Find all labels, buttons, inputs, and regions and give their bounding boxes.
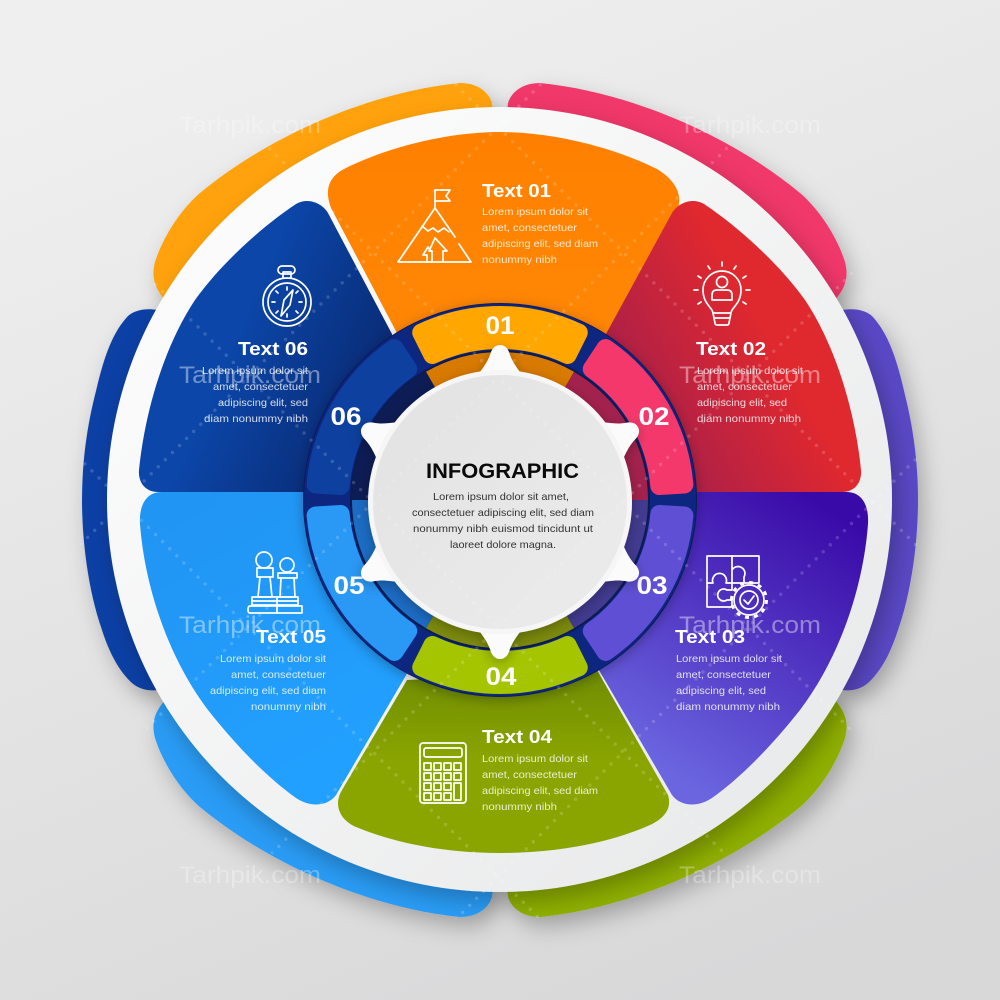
petal: blue [140, 492, 418, 804]
hub body text: Lorem ipsum dolor sit amet, [433, 491, 569, 503]
central ring [300, 304, 700, 696]
icon: calculator [420, 743, 466, 803]
ring numbers: 03 [636, 572, 668, 600]
knobs [350, 345, 650, 659]
icon: puzzle with gear [707, 556, 766, 618]
text block 04: adipiscing elit, sed diam [482, 785, 598, 797]
watermark text: Tarhpik.com [179, 362, 321, 389]
inner dark ring [350, 350, 650, 650]
text block 02: diam nonummy nibh [697, 413, 801, 425]
petal: green [338, 670, 669, 853]
six petals [139, 132, 868, 853]
text block 02: adipiscing elit, sed [697, 397, 787, 409]
outer coloured arcs [82, 83, 918, 917]
arc: purple [800, 309, 918, 690]
text block 03: adipiscing elit, sed [676, 685, 766, 697]
text block 01: Text 01 [482, 181, 551, 201]
text block 01: Lorem ipsum dolor sit [482, 206, 588, 218]
text block 04: Text 04 [482, 727, 552, 747]
arc: navy [82, 309, 200, 690]
text block 04 [482, 727, 598, 813]
petal: orange [328, 132, 679, 335]
text block 06: amet, consectetuer [213, 381, 309, 393]
text block 03 [675, 627, 782, 713]
arc: green [507, 580, 847, 917]
petal: purple [590, 492, 868, 804]
watermark text [179, 112, 821, 889]
text block 04: amet, consectetuer [482, 769, 578, 781]
text block 03: amet, consectetuer [676, 669, 772, 681]
ring numbers [330, 312, 670, 691]
text block 06: adipiscing elit, sed [218, 397, 308, 409]
watermark text: Tarhpik.com [179, 862, 321, 889]
text block 04: nonummy nibh [482, 801, 557, 813]
hub disk [368, 370, 632, 634]
hub body text [412, 491, 594, 551]
text block 05: nonummy nibh [251, 701, 326, 713]
hub face [373, 375, 627, 629]
text block 02: Lorem ipsum dolor sit [697, 365, 803, 377]
hub body text: nonummy nibh euismod tincidunt ut [413, 523, 593, 535]
hub body text: laoreet dolore magna. [450, 539, 556, 551]
text block 06: Lorem ipsum dolor sit [202, 365, 308, 377]
text block 05: Text 05 [256, 627, 326, 647]
text block 03: diam nonummy nibh [676, 701, 780, 713]
icon: mountain with flag [398, 190, 471, 262]
white disk [107, 107, 892, 892]
text block 05 [210, 627, 327, 713]
text block 01: amet, consectetuer [482, 222, 578, 234]
watermark text: Tarhpik.com [179, 612, 321, 639]
ring numbers: 01 [486, 312, 515, 340]
inner band wedges [335, 352, 665, 648]
arc: orange [153, 83, 493, 420]
ring numbers: 02 [638, 403, 670, 431]
watermark text: Tarhpik.com [679, 362, 821, 389]
text block 02: Text 02 [696, 339, 766, 359]
ring numbers: 06 [330, 403, 362, 431]
watermark text: Tarhpik.com [179, 112, 321, 139]
central hub with knobs [350, 345, 650, 659]
text block 04: Lorem ipsum dolor sit [482, 753, 588, 765]
icon: lightbulb with person [694, 262, 750, 325]
icon: compass [263, 266, 311, 326]
watermark dotted lines [84, 83, 917, 918]
text block 01 [482, 181, 598, 266]
watermark text: Tarhpik.com [679, 862, 821, 889]
ring numbers: 04 [486, 663, 517, 691]
icon: chess pieces [248, 552, 302, 613]
text block 06: Text 06 [238, 339, 308, 359]
watermark text: Tarhpik.com [679, 112, 821, 139]
ring numbers: 05 [334, 572, 365, 600]
text block 05: adipiscing elit, sed diam [210, 685, 326, 697]
text block 02: amet, consectetuer [697, 381, 793, 393]
petal: navy [139, 201, 400, 492]
arc: pink [507, 83, 847, 420]
text block 06: diam nonummy nibh [204, 413, 308, 425]
hub title: INFOGRAPHIC [426, 460, 579, 483]
text block 06 [202, 339, 309, 425]
hub body text: consectetuer adipiscing elit, sed diam [412, 507, 594, 519]
text block 03: Lorem ipsum dolor sit [676, 653, 782, 665]
arc: light blue [153, 580, 493, 917]
text block 01: nonummy nibh [482, 254, 557, 266]
text block 05: Lorem ipsum dolor sit [220, 653, 326, 665]
ring base [304, 304, 696, 696]
petal: red [600, 201, 861, 492]
text block 02 [696, 339, 803, 425]
text block 03: Text 03 [675, 627, 745, 647]
watermark text: Tarhpik.com [679, 612, 821, 639]
text block 01: adipiscing elit, sed diam [482, 238, 598, 250]
text block 05: amet, consectetuer [231, 669, 327, 681]
ring segments [300, 315, 700, 685]
